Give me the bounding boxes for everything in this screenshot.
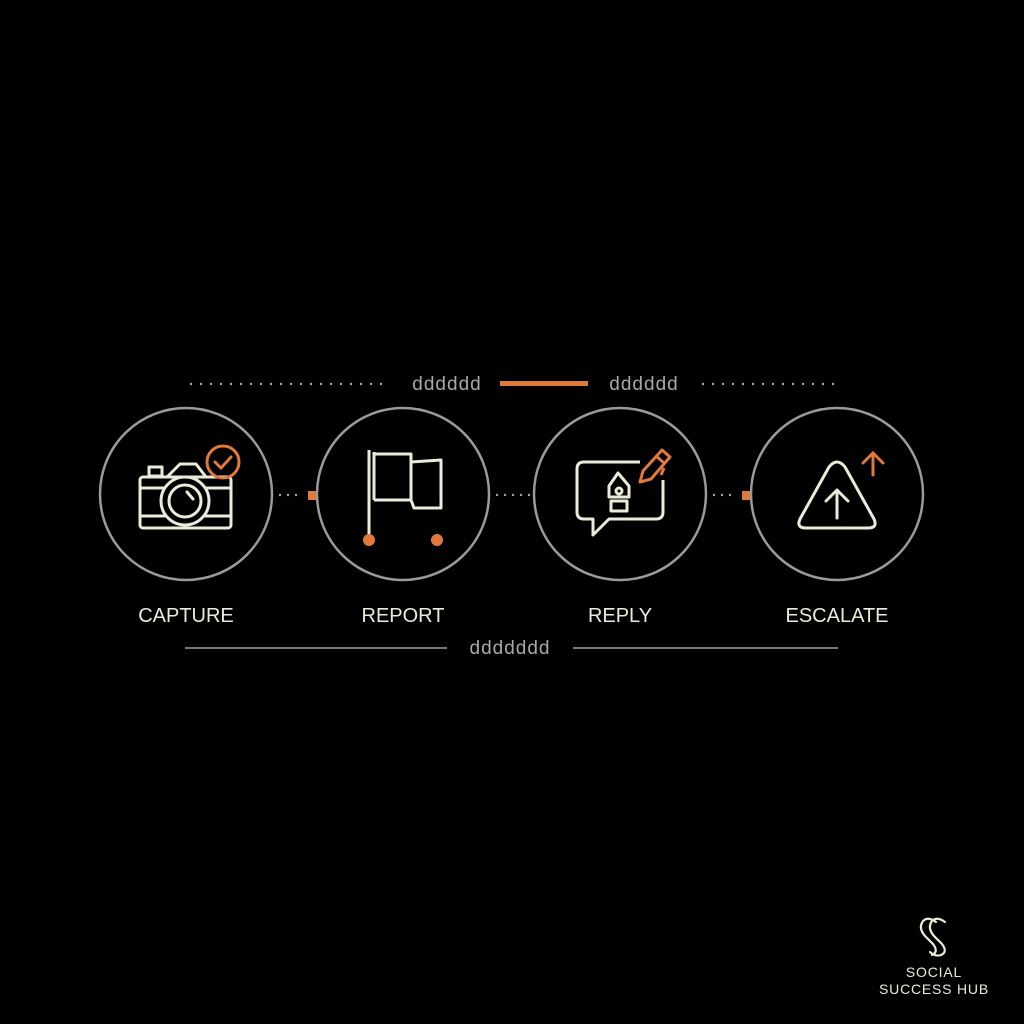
label: capture: CAPTURE [138,605,234,627]
logo: social success hub: SUCCESS HUB [879,981,989,997]
connector 3-4 [714,491,751,500]
bottom footer row: ddddddd [470,638,550,659]
step: report [317,408,489,627]
connector 2-3 [497,494,530,496]
step: reply [534,408,706,627]
logo: social success hub [879,919,989,997]
top header row [191,374,835,395]
top header row: dddddd [412,374,482,395]
label: report: REPORT [362,605,444,627]
icon: speech bubble with pen [577,462,663,535]
icon: pencil [640,450,670,482]
label: escalate: ESCALATE [786,605,888,627]
icon: warning triangle [799,462,875,528]
step: capture [100,408,272,627]
connector 1-2 [280,491,317,500]
logo: social success hub: SOCIAL [906,964,962,980]
label: reply: REPLY [588,605,652,627]
top header row: dddddd [609,374,679,395]
icon: flag [369,450,441,538]
step: escalate [751,408,923,627]
icon: camera [140,464,231,528]
icon: check badge [207,446,239,478]
icon: orange up arrow [863,453,883,475]
